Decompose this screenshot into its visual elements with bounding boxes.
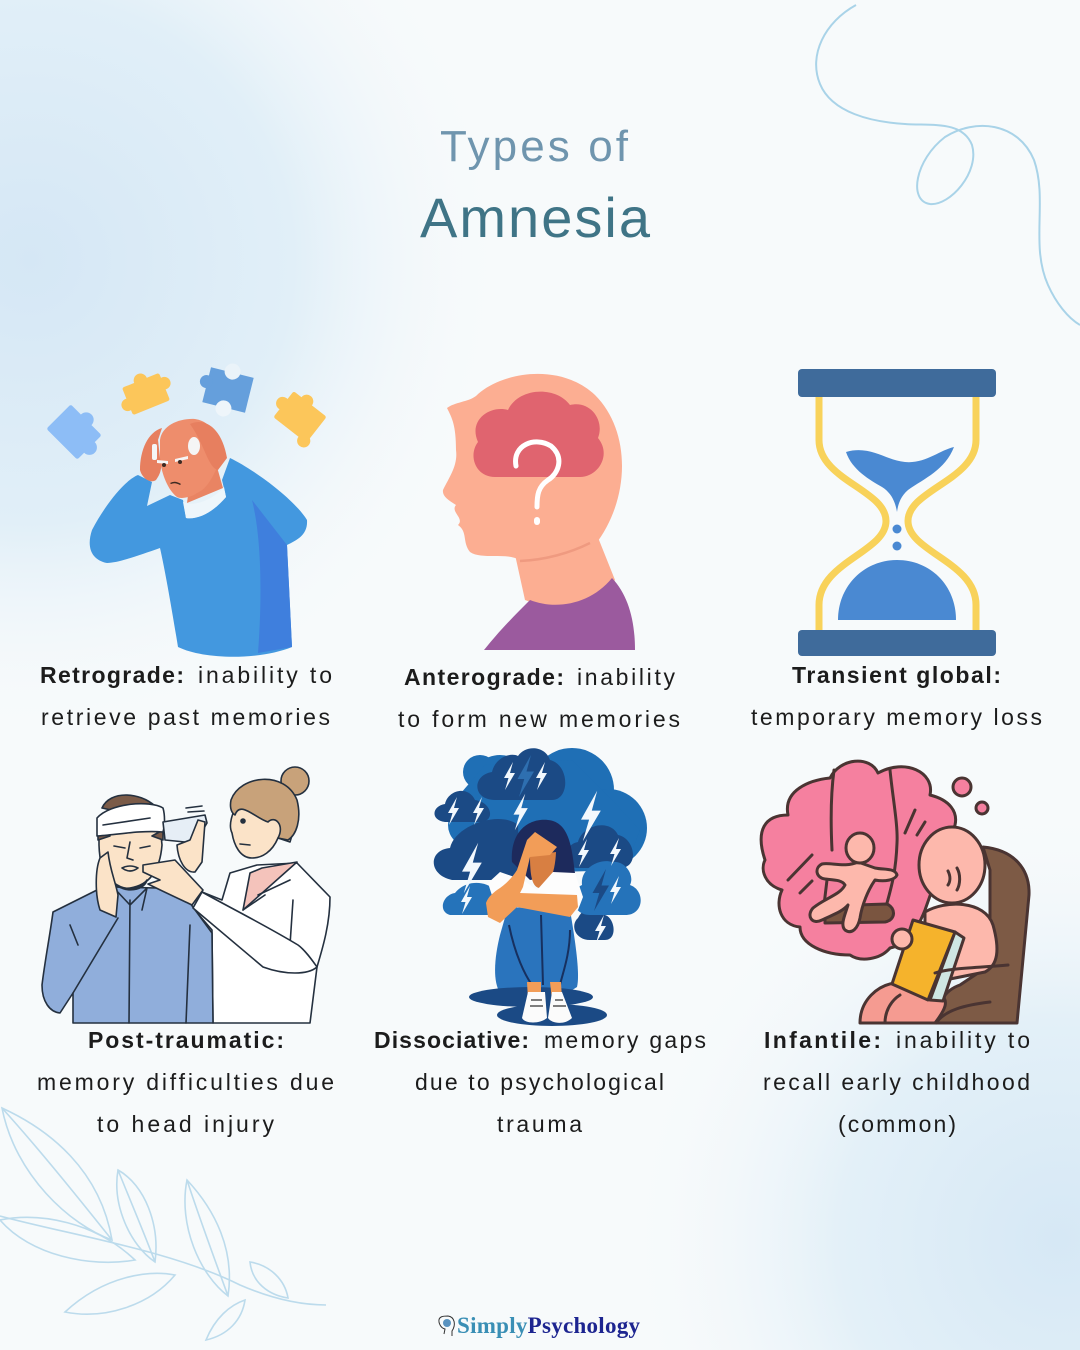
bandage xyxy=(97,804,164,836)
patient beard xyxy=(113,880,147,890)
arm and hand xyxy=(486,832,578,923)
doctor hand on patient xyxy=(143,860,203,905)
shadow xyxy=(469,987,607,1026)
thought dots xyxy=(953,778,971,796)
neck xyxy=(514,530,615,606)
glass outline xyxy=(819,395,976,632)
top cap xyxy=(798,369,996,397)
storm backdrop xyxy=(448,748,647,875)
text: dissociative: Dissociative: xyxy=(374,1027,529,1053)
face xyxy=(530,852,556,888)
text: infantile: (common) xyxy=(838,1111,956,1137)
decorative leaves bottom left xyxy=(0,1108,326,1340)
question mark xyxy=(516,442,559,522)
head profile xyxy=(443,374,622,560)
doctor head xyxy=(230,786,298,858)
lightning bolts xyxy=(448,762,621,943)
illustration: dissociative woman with storm clouds xyxy=(434,748,647,1026)
text: dissociative xyxy=(374,1027,706,1137)
doctor hair xyxy=(230,779,299,840)
patient shirt xyxy=(42,887,213,1023)
glass xyxy=(163,815,207,843)
doctor hair bun xyxy=(281,767,309,795)
adult head xyxy=(919,827,985,903)
swing seat xyxy=(825,904,894,923)
adult hand xyxy=(892,929,912,949)
neck crease xyxy=(520,543,590,561)
text: infantile: Infantile: xyxy=(764,1027,881,1053)
text: transient global: temporary memory loss xyxy=(751,704,1042,730)
text: dissociative: trauma xyxy=(497,1111,582,1137)
bottom sand xyxy=(838,560,956,620)
doctor arm xyxy=(193,892,317,973)
book xyxy=(892,920,955,1000)
text: transient global xyxy=(751,662,1042,730)
text: post-traumatic xyxy=(37,1027,334,1137)
brain cloud xyxy=(473,392,604,477)
sweater xyxy=(90,458,307,657)
text: retrograde: retrieve past memories xyxy=(41,704,330,730)
patient face xyxy=(99,825,162,888)
bottom cap xyxy=(798,630,996,656)
patient hand xyxy=(96,852,118,917)
doctor coat xyxy=(193,863,330,1023)
adult legs xyxy=(860,983,945,1023)
logo: Simply Psychology xyxy=(439,1313,640,1338)
title line: Types of: Types of xyxy=(440,122,629,171)
legs xyxy=(495,907,578,1000)
face lines xyxy=(114,842,150,871)
text: post-traumatic: to head injury xyxy=(97,1111,274,1137)
text: retrograde: inability to xyxy=(198,662,332,688)
hair xyxy=(512,820,575,880)
face details xyxy=(162,460,182,485)
illustration: post-traumatic patient and doctor xyxy=(42,767,330,1023)
title xyxy=(420,122,651,249)
decorative swirl top right xyxy=(816,5,1080,325)
shins xyxy=(527,982,562,1000)
swing ropes xyxy=(824,770,897,905)
motion lines xyxy=(788,810,925,893)
text: infantile: recall early childhood xyxy=(763,1069,1030,1095)
collar xyxy=(183,487,226,518)
icon: puzzle pieces xyxy=(46,357,333,465)
text: transient global: Transient global: xyxy=(792,662,1001,688)
text: anterograde: Anterograde: xyxy=(404,664,564,690)
shirt xyxy=(488,872,583,910)
doctor shirt xyxy=(243,862,297,910)
shoes xyxy=(522,992,572,1023)
head xyxy=(160,419,220,498)
adult body xyxy=(925,904,997,982)
text: post-traumatic: memory difficulties due xyxy=(37,1069,334,1095)
storm clouds xyxy=(434,748,633,940)
illustration: anterograde head with question mark xyxy=(443,374,635,650)
white hair and brows xyxy=(152,437,200,464)
text: retrograde: Retrograde: xyxy=(40,662,184,688)
title line: Amnesia: Amnesia xyxy=(420,186,651,249)
book pages xyxy=(930,932,964,1001)
text: dissociative: due to psychological xyxy=(415,1069,664,1095)
text: infantile: inability to xyxy=(896,1027,1030,1053)
top sand xyxy=(846,447,954,512)
text: dissociative: memory gaps xyxy=(544,1027,706,1053)
illustration: hourglass xyxy=(798,369,996,656)
patient hair xyxy=(102,795,155,812)
illustration: retrograde man with puzzle pieces xyxy=(46,357,333,657)
logo wordmark: SimplyPsychology xyxy=(457,1313,640,1338)
text: retrograde xyxy=(40,662,332,730)
illustration: infantile memory thought bubble xyxy=(761,761,1029,1023)
falling sand dots xyxy=(892,524,902,550)
text: post-traumatic: Post-traumatic: xyxy=(88,1027,284,1053)
shirt xyxy=(484,578,635,650)
chair xyxy=(937,847,1029,1023)
thought bubble xyxy=(761,761,956,959)
doctor raised hand xyxy=(177,820,205,872)
icon: head logo xyxy=(439,1316,454,1336)
neck xyxy=(187,460,223,503)
text: anterograde: inability xyxy=(577,664,676,690)
text: infantile xyxy=(763,1027,1030,1137)
text: anterograde xyxy=(398,664,680,732)
hands xyxy=(140,428,162,481)
baby xyxy=(810,862,897,932)
text: anterograde: to form new memories xyxy=(398,706,680,732)
